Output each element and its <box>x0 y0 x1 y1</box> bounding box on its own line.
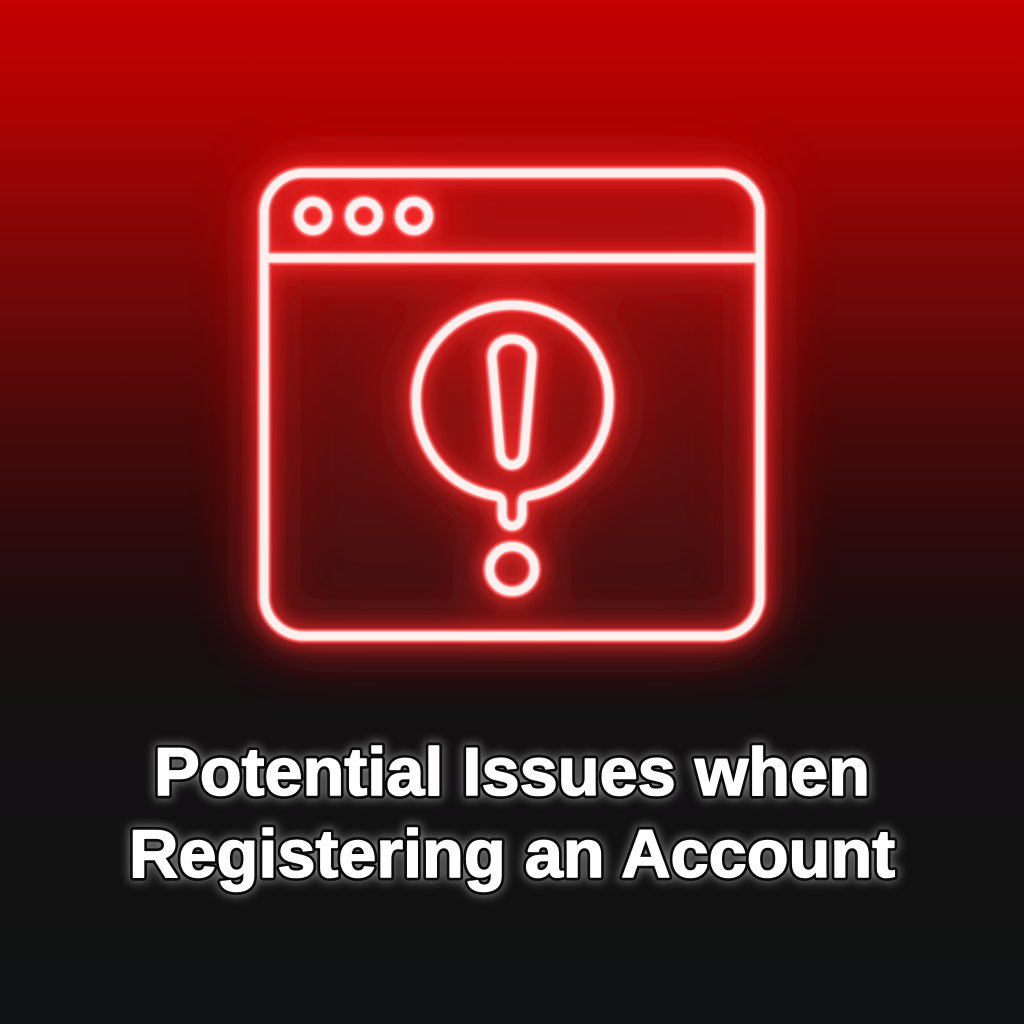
title glow: Registering an Account <box>129 816 895 892</box>
title <box>129 734 895 892</box>
neon browser window icon with warning symbol <box>264 173 760 636</box>
title: Potential Issues when <box>154 734 870 810</box>
title: Potential Issues when <box>154 734 870 810</box>
window interior glow <box>280 185 744 615</box>
title glow <box>129 734 895 892</box>
title: Registering an Account <box>129 816 895 892</box>
title: Registering an Account <box>129 816 895 892</box>
title glow: Potential Issues when <box>154 734 870 810</box>
